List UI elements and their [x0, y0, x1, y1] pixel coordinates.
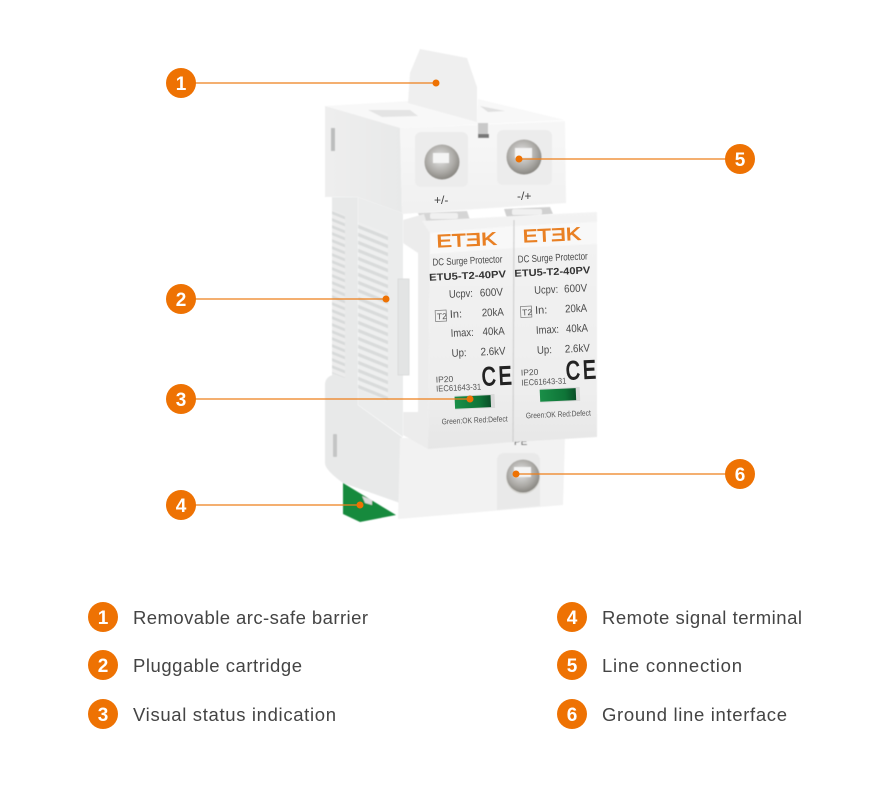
- cartridge side with vents: [358, 197, 409, 437]
- product: surge protector device: [325, 49, 598, 522]
- legend item 6: [557, 699, 787, 729]
- legend item 6: 6: [567, 705, 577, 726]
- right cartridge label: Up:: [537, 344, 552, 357]
- right cartridge label: E: [582, 354, 597, 385]
- left cartridge label: IEC61643-31: [436, 382, 482, 394]
- callout 4: [166, 490, 364, 520]
- left cartridge label: Imax:: [450, 327, 474, 340]
- callout 6: 6: [735, 465, 745, 486]
- line terminal screws: [424, 140, 542, 180]
- legend item 5: [557, 650, 742, 680]
- right cartridge label: In:: [535, 304, 548, 317]
- legend item 4: Remote signal terminal: [602, 607, 802, 628]
- callout 3: 3: [176, 390, 186, 411]
- callout 4: 4: [176, 496, 187, 517]
- left cartridge label: IP20: [436, 374, 454, 385]
- legend item 2: [88, 650, 302, 680]
- right cartridge label: Imax:: [536, 324, 559, 337]
- cartridge clips: [418, 207, 553, 223]
- left cartridge label: 2.6kV: [480, 345, 506, 359]
- legend item 2: Pluggable cartridge: [133, 655, 302, 676]
- legend item 5: 5: [567, 656, 578, 677]
- left cartridge label: 600V: [480, 286, 504, 299]
- right cartridge label: T2: [522, 307, 533, 317]
- legend item 1: 1: [98, 608, 109, 629]
- callout 6: [512, 459, 755, 489]
- left cartridge label: 40kA: [482, 325, 505, 338]
- legend item 2: 2: [98, 656, 108, 677]
- right cartridge label: IEC61643-31: [521, 376, 567, 388]
- right cartridge label: IP20: [521, 367, 539, 378]
- right cartridge label: C: [565, 355, 581, 386]
- left cartridge label: In:: [450, 308, 462, 321]
- legend item 3: Visual status indication: [133, 704, 336, 725]
- left cartridge label: [427, 228, 514, 427]
- right cartridge label: Ucpv:: [534, 284, 558, 297]
- left cartridge label: Ucpv:: [449, 288, 473, 301]
- green remote signal terminal: [343, 483, 396, 522]
- callout 1: [166, 68, 440, 98]
- legend item 4: 4: [567, 608, 578, 629]
- terminal polarity labels: -/+: [517, 189, 531, 203]
- terminal polarity labels: +/-: [434, 193, 448, 207]
- legend item 3: 3: [98, 705, 108, 726]
- right cartridge label: 600V: [564, 282, 588, 296]
- base module with ground terminal: PE: [514, 437, 528, 448]
- callout 5: [516, 144, 755, 174]
- terminal polarity labels: [434, 189, 531, 207]
- right cartridge label: Green:OK Red:Defect: [526, 408, 592, 420]
- legend item 1: [88, 602, 368, 632]
- right cartridge label: [512, 223, 598, 421]
- top module with terminals: [325, 99, 566, 214]
- legend item 6: Ground line interface: [602, 704, 787, 725]
- left cartridge label: ETƎK: [436, 229, 497, 251]
- left cartridge label: C: [481, 361, 496, 391]
- callout 1: 1: [176, 74, 187, 95]
- right cartridge label: DC Surge Protector: [518, 251, 588, 266]
- left cartridge label: E: [498, 360, 512, 391]
- left cartridge label: T2: [437, 311, 447, 321]
- right cartridge label: ETƎK: [522, 224, 581, 246]
- right cartridge label: 2.6kV: [565, 342, 591, 356]
- legend: [88, 602, 802, 729]
- callout 5: 5: [735, 150, 746, 171]
- right cartridge label: 20kA: [565, 303, 588, 316]
- callout 3: [166, 384, 474, 414]
- legend item 5: Line connection: [602, 655, 742, 676]
- din rail side body: [325, 197, 402, 503]
- callout 2: 2: [176, 290, 186, 311]
- callout 2: [166, 284, 390, 314]
- base module with ground terminal: [398, 436, 565, 519]
- pluggable cartridges: [403, 212, 597, 449]
- left cartridge label: Green:OK Red:Defect: [441, 414, 508, 426]
- legend item 4: [557, 602, 802, 632]
- removable arc-safe barrier: [408, 49, 477, 122]
- legend item 1: Removable arc-safe barrier: [133, 607, 368, 628]
- legend item 3: [88, 699, 336, 729]
- left cartridge label: Up:: [451, 347, 467, 360]
- right cartridge label: ETU5-T2-40PV: [514, 265, 591, 280]
- left cartridge label: 20kA: [482, 306, 505, 319]
- left cartridge label: ETU5-T2-40PV: [429, 269, 507, 284]
- right cartridge label: 40kA: [566, 322, 589, 335]
- left cartridge label: DC Surge Protector: [432, 254, 503, 269]
